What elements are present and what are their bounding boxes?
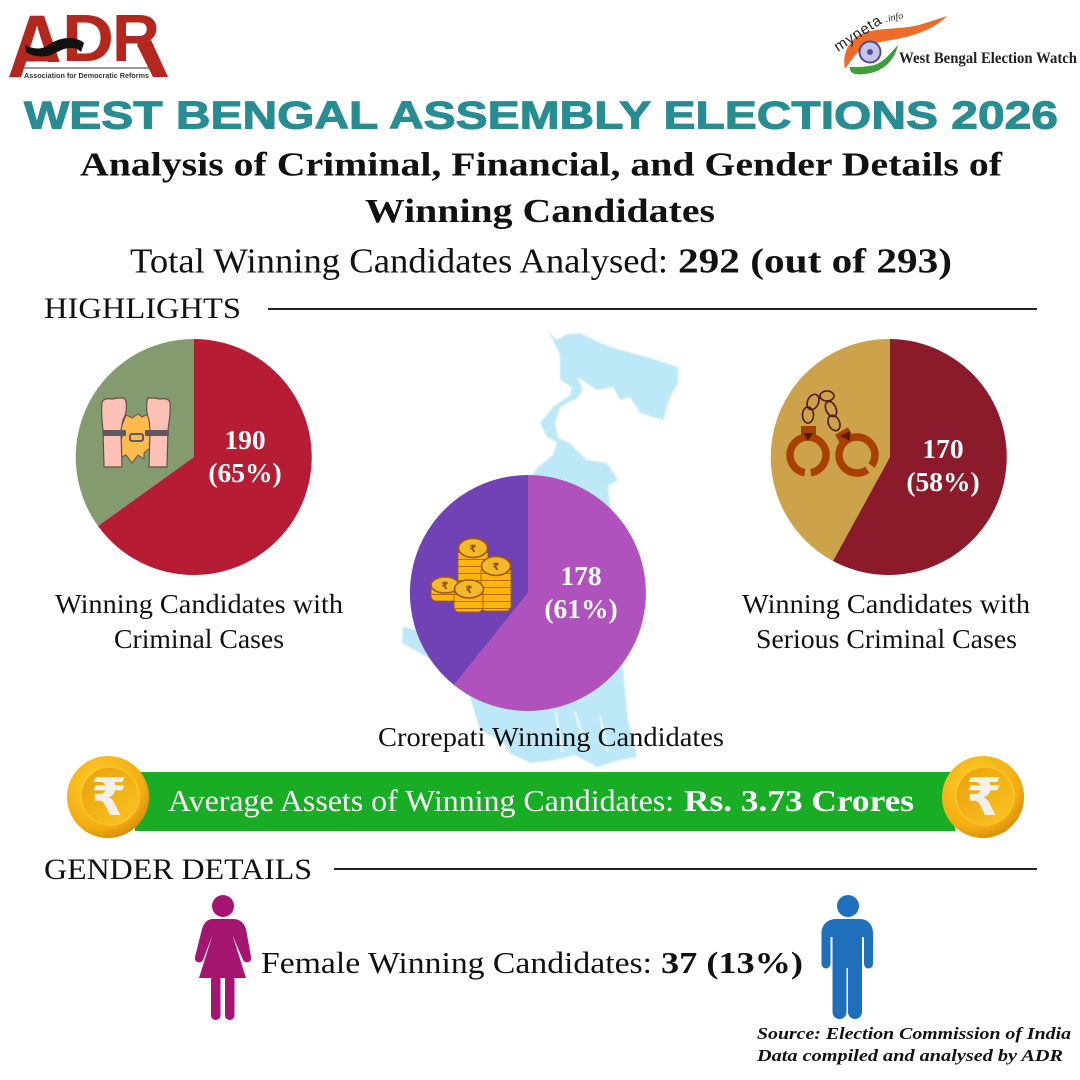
icon: coin stacks: ₹ bbox=[470, 544, 477, 555]
logo: myneta West Bengal Election Watch bbox=[831, 10, 1077, 74]
logo: ADR: R bbox=[112, 1, 160, 76]
label: serious criminal cases: Serious Criminal Cases bbox=[756, 623, 1017, 654]
heading: highlights: HIGHLIGHTS bbox=[44, 292, 241, 325]
subtitle: Winning Candidates bbox=[365, 193, 715, 230]
source note: Data compiled and analysed by ADR bbox=[756, 1046, 1063, 1065]
label: criminal cases bbox=[55, 588, 343, 654]
pie: criminal cases bbox=[76, 339, 312, 575]
value: 190 (65%): (65%) bbox=[208, 457, 282, 488]
label: crorepati: Crorepati Winning Candidates bbox=[378, 721, 724, 752]
banner: average assets: Rs. 3.73 Crores bbox=[684, 783, 914, 818]
gender text: 37 (13%) bbox=[661, 945, 803, 980]
value: 170 (58%): 170 bbox=[922, 433, 964, 464]
banner: average assets: Average Assets of Winning Candidates: bbox=[168, 783, 674, 818]
subtitle: Analysis of Criminal, Financial, and Gender Details of bbox=[80, 146, 1003, 184]
logo: ADR bbox=[7, 0, 168, 96]
value: 190 (65%) bbox=[208, 424, 282, 488]
subtitle bbox=[80, 146, 1003, 230]
icon: rupee coin right: ₹ bbox=[966, 768, 1002, 828]
source note: Source: Election Commission of India bbox=[757, 1024, 1071, 1043]
icon: rupee coin right bbox=[942, 756, 1024, 838]
value: 170 (58%): (58%) bbox=[906, 466, 980, 497]
pie: crorepati bbox=[410, 475, 646, 711]
value: 178 (61%): 178 bbox=[560, 560, 602, 591]
value: 190 (65%): 190 bbox=[224, 424, 266, 455]
label: serious criminal cases: Winning Candidates with bbox=[742, 588, 1030, 619]
icon: coin stacks: ₹ bbox=[466, 585, 473, 596]
icon: handcuffs bbox=[787, 391, 882, 480]
icon: rupee coin left bbox=[67, 756, 149, 838]
banner: average assets bbox=[67, 756, 1024, 838]
gender text bbox=[261, 945, 803, 980]
icon: rupee coin left: ₹ bbox=[91, 768, 127, 828]
gender text: Female Winning Candidates: bbox=[261, 945, 652, 980]
logo: ADR: Association for Democratic Reforms bbox=[24, 71, 149, 80]
pie: serious criminal cases bbox=[771, 339, 1007, 575]
icon: coin stacks: ₹ bbox=[442, 581, 449, 592]
logo: myneta West Bengal Election Watch: myneta bbox=[831, 12, 885, 55]
icon: bound hands bbox=[102, 398, 170, 467]
logo: ADR: D bbox=[62, 1, 114, 76]
label: serious criminal cases bbox=[742, 588, 1030, 654]
label: criminal cases: Criminal Cases bbox=[114, 623, 284, 654]
icon: coin stacks: ₹ bbox=[493, 562, 500, 573]
map: West Bengal bbox=[402, 330, 678, 767]
title: WEST BENGAL ASSEMBLY ELECTIONS 2026 bbox=[24, 94, 1058, 138]
icon: female figure bbox=[195, 895, 251, 1020]
icon: coin stacks bbox=[431, 538, 511, 612]
logo: myneta West Bengal Election Watch: .info bbox=[884, 10, 904, 25]
value: 178 (61%): (61%) bbox=[544, 593, 618, 624]
total analysed: Total Winning Candidates Analysed: bbox=[130, 242, 668, 280]
value: 178 (61%) bbox=[544, 560, 618, 624]
source note bbox=[756, 1024, 1071, 1065]
heading: gender details: GENDER DETAILS bbox=[44, 853, 312, 886]
total analysed bbox=[130, 242, 952, 280]
value: 170 (58%) bbox=[906, 433, 980, 497]
total analysed: 292 (out of 293) bbox=[678, 242, 952, 280]
label: criminal cases: Winning Candidates with bbox=[55, 588, 343, 619]
icon: male figure bbox=[822, 895, 873, 1019]
